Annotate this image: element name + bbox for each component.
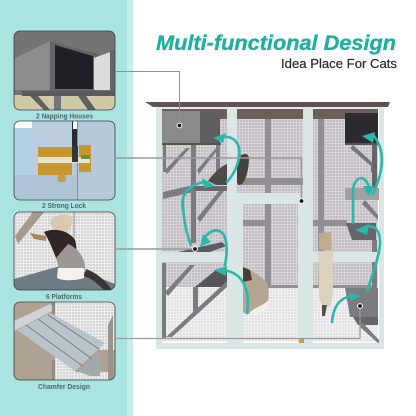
panel: napping house photo	[14, 31, 115, 110]
subtitle: Idea Place For Cats	[281, 57, 397, 71]
label: strong lock: 2 Strong Lock	[42, 201, 87, 210]
label: napping houses: 2 Napping Houses	[36, 112, 93, 120]
title: Multi-functional Design	[156, 32, 396, 55]
cat standing	[318, 232, 333, 316]
mesh back wall	[160, 118, 378, 288]
cat	[30, 215, 112, 290]
panel: strong lock photo	[14, 121, 115, 200]
panel: teal sidebar background	[0, 0, 133, 416]
callout line: platforms	[115, 247, 197, 251]
panel: chamfer design photo	[14, 302, 115, 380]
catio enclosure illustration	[145, 102, 390, 349]
cat on floor	[243, 267, 269, 314]
panel frame: strong lock	[14, 121, 115, 200]
label: chamfer design: Chamfer Design	[38, 382, 90, 391]
teal climbing arrows	[182, 136, 382, 322]
roof	[145, 102, 390, 107]
brass latch plates	[38, 145, 91, 182]
panel frame: napping house	[14, 31, 115, 110]
rear structural beams	[237, 118, 373, 288]
panel: platforms photo	[14, 212, 115, 290]
callout line: chamfer design	[115, 304, 362, 338]
teal arrowheads	[200, 132, 375, 301]
mesh floor	[160, 287, 378, 342]
left ladder and shelves	[162, 145, 227, 338]
callout line: strong lock	[115, 158, 304, 203]
cat upper	[208, 154, 249, 185]
brass latch	[299, 339, 304, 343]
enclosure frame	[156, 105, 384, 349]
panel frame: platforms	[14, 212, 115, 290]
right ladder and shelves	[345, 188, 379, 344]
right napping house	[345, 113, 378, 195]
label: platforms: 6 Platforms	[46, 292, 82, 301]
panel frame: chamfer design	[14, 302, 115, 380]
underside of roof	[160, 109, 378, 119]
left napping house	[161, 111, 221, 145]
callout line: napping houses	[115, 72, 182, 128]
